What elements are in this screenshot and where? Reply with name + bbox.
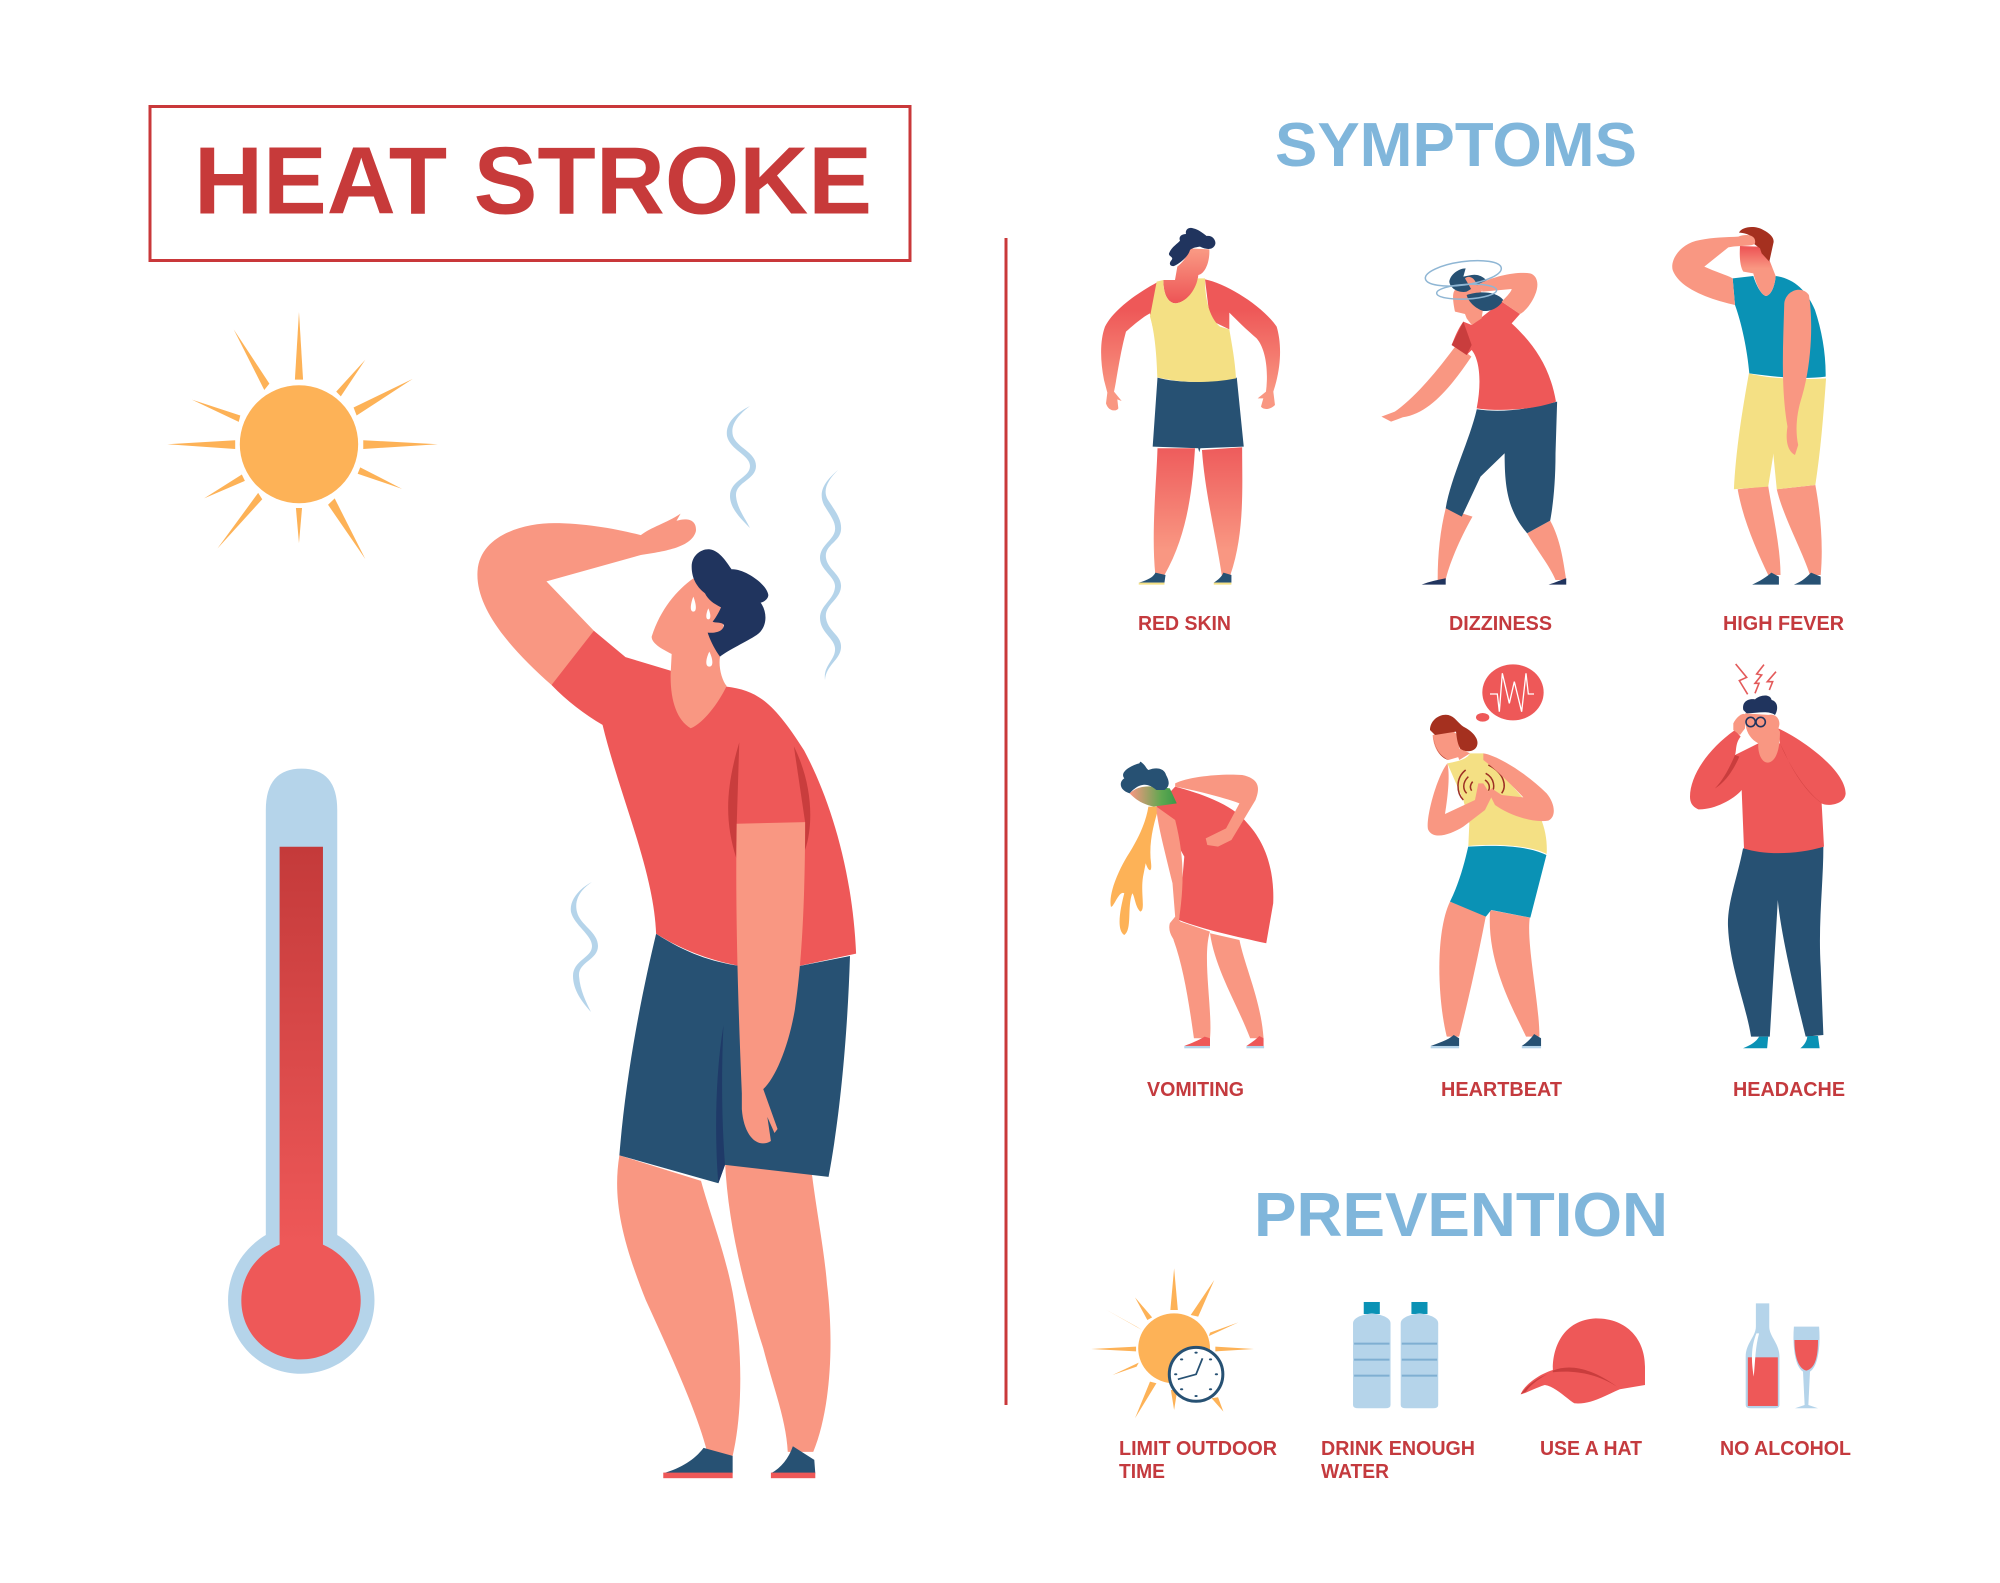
label: red skin: RED SKIN <box>1138 613 1231 635</box>
heading: prevention: PREVENTION <box>1254 1181 1668 1250</box>
heat waves <box>571 406 841 1012</box>
head <box>652 549 768 728</box>
label: drink enough water: DRINK ENOUGH <box>1321 1438 1475 1460</box>
shoes <box>663 1446 815 1478</box>
label: drink enough water <box>1321 1438 1475 1483</box>
pants and shoes <box>1728 847 1823 1048</box>
label: limit outdoor time: TIME <box>1119 1461 1165 1483</box>
label: drink enough water: WATER <box>1321 1461 1389 1483</box>
icon: sun <box>167 312 438 559</box>
label: limit outdoor time: LIMIT OUTDOOR <box>1119 1438 1277 1460</box>
label: heartbeat: HEARTBEAT <box>1441 1079 1563 1101</box>
raised arm <box>477 514 696 685</box>
figure: vomiting <box>1110 762 1273 1048</box>
figure: heartbeat <box>1428 664 1554 1048</box>
upper body <box>1101 228 1280 410</box>
hanging arm <box>736 822 805 1143</box>
label: use a hat: USE A HAT <box>1540 1438 1643 1460</box>
heading: symptoms: SYMPTOMS <box>1275 111 1637 180</box>
sweat drops <box>691 597 712 667</box>
figure: dizziness <box>1381 256 1566 585</box>
upper body and thought bubble <box>1428 664 1554 854</box>
figure: red skin <box>1101 228 1280 585</box>
body <box>477 514 856 1478</box>
legs <box>617 1155 831 1456</box>
label: limit outdoor time <box>1119 1438 1277 1483</box>
lower body <box>1139 378 1244 585</box>
figure: headache <box>1690 664 1846 1048</box>
shirt <box>552 631 856 967</box>
icon: bottle and wine glass <box>1746 1303 1820 1408</box>
upper body <box>1424 256 1556 410</box>
icon: water bottles <box>1353 1302 1438 1408</box>
icon: sun with clock <box>1091 1268 1254 1418</box>
title: HEAT STROKE <box>194 129 872 235</box>
divider <box>1004 238 1008 1405</box>
label: vomiting: VOMITING <box>1147 1079 1244 1101</box>
face and neck <box>652 578 727 728</box>
label: high fever: HIGH FEVER <box>1723 613 1844 635</box>
lower body <box>1381 345 1566 585</box>
main figure: man shielding eyes <box>477 514 856 1478</box>
icon: hat <box>1521 1318 1645 1403</box>
thermometer <box>228 769 374 1374</box>
shorts <box>619 934 850 1183</box>
hanging arm <box>1783 290 1811 455</box>
figure: high fever <box>1672 227 1826 585</box>
label: dizziness: DIZZINESS <box>1449 613 1552 635</box>
lower body <box>1431 846 1546 1048</box>
hair <box>692 549 768 657</box>
sleeve folds <box>728 742 810 858</box>
lower body <box>1734 373 1826 585</box>
upper body <box>1690 664 1846 853</box>
upper body <box>1672 227 1826 378</box>
title <box>150 106 910 260</box>
label: headache: HEADACHE <box>1733 1079 1845 1101</box>
label: no alcohol: NO ALCOHOL <box>1720 1438 1851 1460</box>
